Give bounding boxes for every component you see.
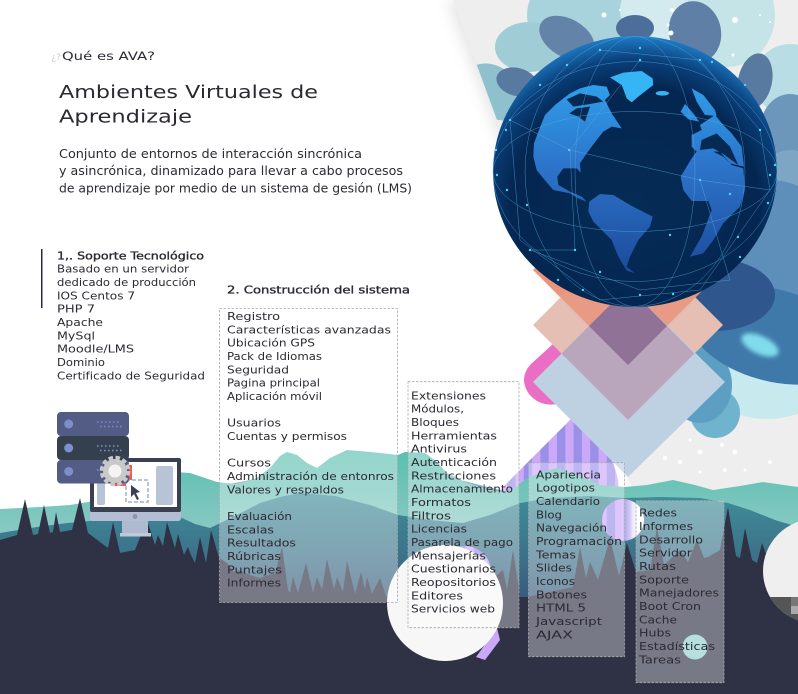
panel 1 (220, 308, 398, 602)
server stack (57, 412, 129, 484)
purple circle behind white circle (439, 546, 491, 598)
soporte list (57, 264, 205, 382)
panel 4: Informes (639, 521, 693, 533)
glitter on grey background (663, 438, 772, 474)
soporte list: PHP 7 (57, 304, 95, 316)
panel 2: Extensiones (411, 390, 486, 402)
soporte list: Dominio (57, 357, 105, 369)
panel 4: Hubs (639, 628, 671, 640)
heading: soporte: 1,. Soporte Tecnológico (57, 250, 204, 262)
panel 2: Restricciones (411, 470, 496, 482)
striped purple shape (498, 418, 622, 520)
panel 4 (636, 501, 724, 683)
right circle (763, 519, 798, 627)
panel 3: Programación (536, 536, 622, 548)
panel 3: Apariencia (536, 469, 601, 481)
globe (493, 36, 777, 307)
diamonds (533, 175, 725, 477)
panel 1: Evaluación (227, 511, 292, 523)
panel 2: Reopositorios (411, 577, 496, 589)
panel 4: Tareas (638, 654, 681, 666)
question label (51, 49, 155, 63)
panel 3: Calendario (536, 496, 600, 508)
panel 1: Pack de Idiomas (227, 351, 322, 363)
panel 1: Registro (227, 311, 280, 323)
question label: ¿? (51, 53, 61, 63)
panel 3: Slides (536, 563, 572, 575)
icon: server and monitor (57, 412, 181, 536)
panel 1: Usuarios (227, 418, 281, 430)
panel 2: Mensajerías (411, 550, 486, 562)
monitor (90, 458, 181, 536)
soporte list: Certificado de Seguridad (57, 370, 205, 382)
pink rounded shape (524, 344, 600, 405)
panel 1: Informes (227, 578, 281, 590)
panel 4: Desarrollo (639, 534, 703, 546)
panel 3 (528, 463, 624, 657)
continents (533, 71, 745, 273)
panel 1: Resultados (227, 538, 296, 550)
title (59, 82, 318, 128)
description (59, 146, 412, 196)
panel 3: Botones (536, 589, 587, 601)
panel 4: Boot Cron (639, 601, 701, 613)
panel 2: Bloques (411, 417, 459, 429)
panel 2: Filtros (411, 510, 451, 522)
description: Conjunto de entornos de interacción sincrónica (59, 146, 362, 161)
heading: construccion: 2. Construcción del sistema (227, 284, 410, 296)
front teal hill (0, 450, 798, 533)
panel 2: Antivirus (411, 444, 467, 456)
teal small circle (682, 634, 708, 660)
panel 1: Puntajes (227, 564, 282, 576)
panel 1: Escalas (227, 524, 274, 536)
soporte list: Apache (57, 317, 103, 329)
panel 4: Manejadores (639, 588, 719, 600)
back hills (0, 465, 798, 640)
panel 3: Iconos (536, 576, 575, 588)
panel 2: Cuestionarios (411, 564, 496, 576)
panel 2: Formatos (411, 497, 471, 509)
description: de aprendizaje por medio de un sistema de gesión (LMS) (59, 180, 412, 196)
panel 2: Pasarela de pago (411, 537, 513, 549)
panel 4: Rutas (639, 561, 676, 573)
panel 1: Seguridad (227, 364, 289, 376)
purple lens over hills (602, 499, 644, 541)
panel 1: Aplicación móvil (227, 391, 322, 403)
panel 3: Navegación (536, 523, 607, 535)
panel 2: Módulos, (411, 404, 464, 416)
panel 2 (408, 382, 519, 628)
panel 3: Temas (535, 549, 576, 561)
panel 4: Cache (639, 614, 677, 626)
panel 1: Cursos (227, 458, 271, 470)
panel 2: Herramientas (411, 430, 497, 442)
panel 4: Servidor (639, 548, 693, 560)
question label: Qué es AVA? (62, 49, 155, 63)
panel 3: Blog (536, 509, 562, 521)
title: Ambientes Virtuales de (59, 82, 318, 103)
dark mountains silhouette (0, 498, 798, 694)
panel 2: Autenticación (411, 457, 497, 469)
title: Aprendizaje (59, 106, 192, 128)
soporte list: IOS Centos 7 (57, 290, 135, 302)
soporte list: Moodle/LMS (57, 344, 134, 356)
text block: soporte tecnologico (57, 250, 205, 382)
flower petals behind the globe (454, 0, 798, 438)
panel 1: Características avanzadas (227, 324, 391, 336)
panel 1: Rúbricas (227, 551, 281, 563)
panel 3: Javascript (535, 616, 602, 628)
panel 3: HTML 5 (536, 603, 586, 615)
accent line (41, 249, 42, 308)
panel 4: Estadísticas (639, 641, 715, 653)
decorative grey page fold (447, 0, 798, 510)
panel 2: Licencias (411, 524, 467, 536)
panel 4: Redes (639, 508, 677, 520)
panel 1: Administración de entonros (227, 471, 394, 483)
panel 2: Almacenamiento (411, 484, 513, 496)
panel 2: Servicios web (411, 604, 495, 616)
soporte list: dedicado de producción (57, 277, 196, 289)
white circle (387, 545, 503, 661)
panel 1: Pagina principal (227, 378, 320, 390)
panel 2: Editores (411, 590, 463, 602)
gear (102, 458, 128, 484)
panel 3: AJAX (536, 629, 573, 641)
panel 3: Logotipos (536, 483, 595, 495)
panel 4: Soporte (639, 574, 689, 586)
description: y asincrónica, dinamizado para llevar a cabo procesos (59, 163, 403, 178)
soporte list: MySql (57, 330, 95, 342)
panel 1: Valores y respaldos (227, 484, 344, 496)
panel 1: Cuentas y permisos (227, 431, 347, 443)
panel 1: Ubicación GPS (227, 338, 315, 350)
purple corner (476, 628, 500, 660)
network lines (493, 36, 777, 306)
network dots (495, 47, 776, 296)
soporte list: Basado en un servidor (57, 264, 190, 276)
